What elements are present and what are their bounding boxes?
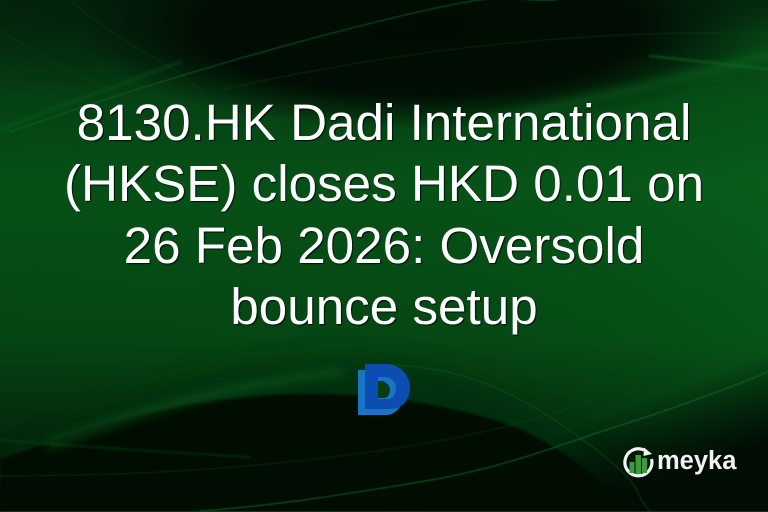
icon: meyka circle with bars: [623, 447, 654, 478]
wordmark: meyka: [657, 447, 736, 475]
title: bounce setup: [230, 278, 538, 335]
bottom dark hump: [0, 394, 632, 512]
icon: company D logo: [358, 364, 410, 415]
title: 26 Feb 2026: Oversold: [124, 217, 644, 274]
lower dark sweep: [0, 360, 655, 512]
title: [64, 94, 704, 336]
logo: meyka: [623, 447, 737, 478]
title: (HKSE) closes HKD 0.01 on: [64, 155, 704, 212]
title: 8130.HK Dadi International: [77, 94, 691, 151]
